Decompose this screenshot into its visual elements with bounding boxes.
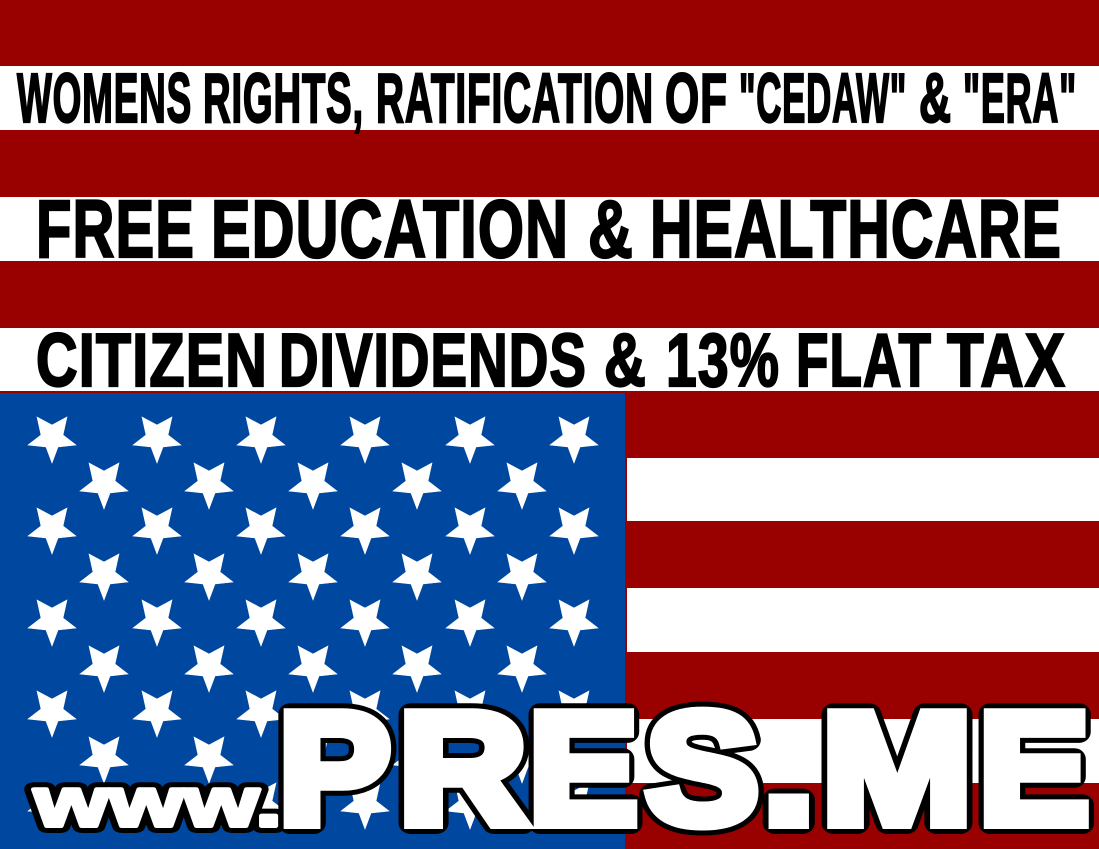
heading: womens rights: "CEDAW" xyxy=(739,59,907,137)
heading: womens rights xyxy=(17,59,1077,137)
heading: womens rights: & xyxy=(919,59,952,137)
heading: citizen dividends and flat tax: DIVIDENDS xyxy=(279,318,587,402)
heading: citizen dividends and flat tax: & xyxy=(604,318,647,402)
heading: free education and healthcare: & xyxy=(588,184,634,275)
blue canton with stars xyxy=(0,393,625,849)
heading: citizen dividends and flat tax: CITIZEN xyxy=(36,318,268,402)
heading: free education and healthcare: FREE xyxy=(36,184,195,275)
heading: womens rights: WOMENS xyxy=(17,59,192,137)
heading: citizen dividends and flat tax: TAX xyxy=(947,318,1066,402)
heading: citizen dividends and flat tax xyxy=(36,318,1066,402)
www prefix: www. xyxy=(33,763,282,841)
heading: citizen dividends and flat tax: 13% xyxy=(666,318,780,402)
pres.me outline xyxy=(279,681,1089,849)
pres.me letters xyxy=(279,681,1089,849)
heading: citizen dividends and flat tax: FLAT xyxy=(796,318,932,402)
heading: free education and healthcare xyxy=(36,184,1062,275)
heading: womens rights: RIGHTS, xyxy=(203,59,364,137)
website address xyxy=(33,681,1089,849)
heading: womens rights: OF xyxy=(665,59,728,137)
heading: womens rights: RATIFICATION xyxy=(376,59,654,137)
www prefix: www. xyxy=(33,763,282,841)
heading: free education and healthcare: EDUCATION xyxy=(211,184,569,275)
